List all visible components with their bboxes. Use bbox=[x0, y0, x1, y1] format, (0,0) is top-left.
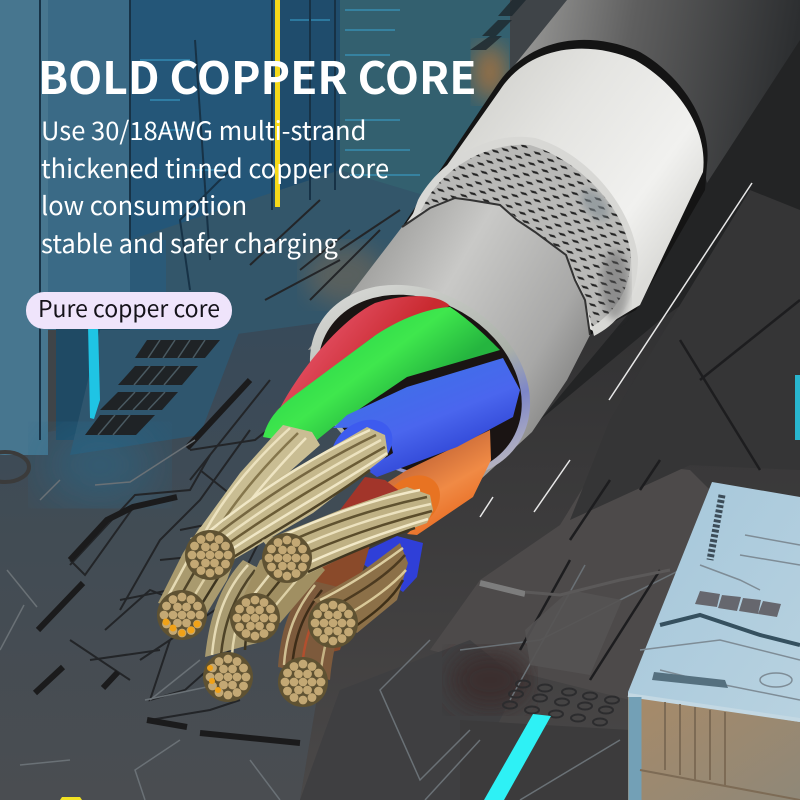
right floor bbox=[300, 0, 800, 800]
bundle ends bbox=[157, 530, 358, 707]
bundle F bbox=[313, 543, 408, 633]
circuit traces bbox=[70, 200, 400, 720]
bundle C bbox=[243, 545, 325, 623]
description text: low consumption bbox=[41, 186, 247, 223]
blue-side bundle bbox=[190, 427, 388, 575]
orange-side bundle bbox=[262, 487, 433, 580]
bundle B bbox=[158, 527, 240, 613]
wires bbox=[263, 296, 520, 592]
lower blue wire bbox=[353, 536, 423, 592]
cable: metal braid bbox=[410, 137, 638, 336]
description text bbox=[41, 111, 389, 261]
circuit box bbox=[628, 482, 800, 800]
tower details bbox=[140, 10, 420, 175]
left wall bbox=[0, 0, 48, 455]
warm glow bbox=[305, 245, 385, 305]
red wire bbox=[273, 296, 450, 413]
tower bbox=[56, 320, 130, 440]
dots bbox=[503, 680, 619, 726]
red and orange inner strands bbox=[310, 477, 405, 575]
green wire bbox=[263, 307, 500, 440]
lower left floor bbox=[0, 290, 420, 800]
bundle E bbox=[278, 580, 350, 680]
copper bundles bbox=[158, 425, 433, 680]
green-side bundle bbox=[195, 425, 320, 540]
cable: tube bbox=[308, 198, 590, 480]
white guide lines bbox=[480, 183, 752, 517]
cable: white jacket bbox=[400, 40, 708, 335]
description text: stable and safer charging bbox=[41, 224, 338, 261]
title: BOLD COPPER CORE bbox=[38, 43, 476, 107]
description text: thickened tinned copper core bbox=[41, 149, 389, 186]
bundle D bbox=[205, 560, 262, 657]
pill label: Pure copper core bbox=[38, 290, 220, 324]
orange wire bbox=[380, 430, 491, 535]
description text: Use 30/18AWG multi-strand bbox=[41, 111, 366, 148]
blue wire bbox=[333, 358, 520, 477]
cable mouth bbox=[275, 246, 565, 518]
vents bbox=[85, 340, 220, 435]
dark band behind cable bbox=[500, 0, 800, 183]
